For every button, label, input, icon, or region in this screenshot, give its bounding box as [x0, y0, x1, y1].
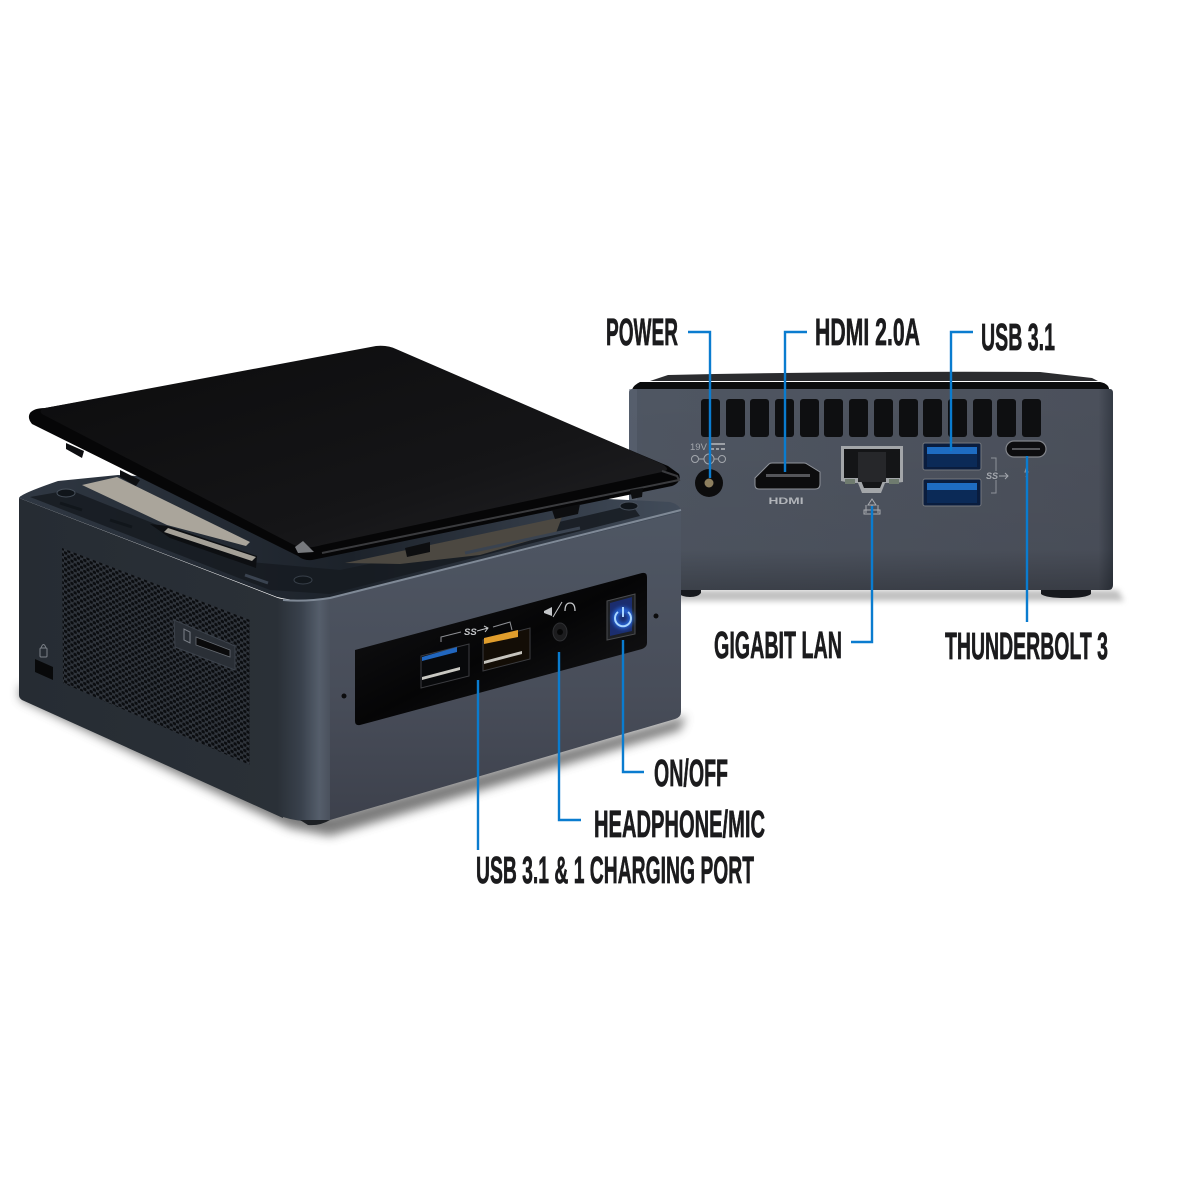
rounded corner strip: [277, 596, 330, 821]
leader: gigabit LAN: [851, 506, 872, 642]
rear device feet: [678, 589, 1091, 598]
leader: power: [688, 332, 710, 478]
leader: USB 3.1 rear: [951, 332, 973, 451]
left side face: [19, 498, 283, 818]
SS USB logo: SS: [464, 627, 477, 638]
lid clips: [66, 443, 643, 557]
headphone and mic jack: [544, 602, 575, 641]
right device: rear view: [629, 372, 1124, 601]
leader: USB 3.1 front: [477, 680, 479, 850]
shadow under rear device: [660, 590, 1124, 601]
rear bar details: [60, 503, 132, 527]
leader: Thunderbolt 3: [1026, 456, 1028, 622]
leader lines: [478, 332, 1027, 850]
HDMI port: [755, 463, 820, 506]
power jack with 19V marking: [690, 442, 726, 497]
silver drive bay: [82, 477, 250, 546]
label: HEADPHONE/MIC: HEADPHONE/MIC: [594, 804, 765, 846]
leader: headphone/mic: [559, 652, 581, 820]
power jack with 19V marking: 19V: [690, 442, 708, 453]
rear vent slots: [701, 399, 1041, 437]
rear device lid: [632, 382, 1109, 391]
front black port panel: [342, 573, 658, 725]
label: USB 3.1: USB 3.1: [981, 317, 1055, 359]
HDMI port: HDMI: [768, 496, 804, 506]
raised black lid: [29, 347, 680, 560]
rear device body: [629, 389, 1113, 590]
right front face: [330, 507, 681, 820]
front USB orange charging port: [483, 628, 530, 671]
front USB blue port: [421, 644, 469, 688]
left device: front view with raised lid: [19, 346, 686, 836]
top face: [19, 475, 681, 600]
front device foot: [300, 820, 330, 825]
LAN port: [841, 446, 903, 514]
label: POWER: POWER: [606, 312, 678, 354]
label: GIGABIT LAN: GIGABIT LAN: [714, 625, 842, 667]
shadow under front device: [20, 685, 686, 836]
leader: HDMI: [785, 332, 807, 472]
label: ON/OFF: ON/OFF: [654, 753, 728, 795]
power button: [607, 594, 635, 640]
USB 3.1 rear ports: SS: [986, 471, 998, 481]
USB-C Thunderbolt port: [1006, 441, 1046, 477]
side mesh vent: [62, 548, 250, 765]
SD card slot: [174, 620, 235, 670]
lock slot: [35, 644, 53, 680]
label: USB 3.1 & 1 CHARGING PORT: USB 3.1 & 1 CHARGING PORT: [476, 850, 754, 892]
USB 3.1 rear ports: [923, 443, 1008, 506]
label: HDMI 2.0A: HDMI 2.0A: [815, 312, 920, 354]
screw holes: [57, 489, 638, 584]
leader: on/off: [623, 640, 644, 772]
dark disc under lid: [345, 517, 562, 564]
SS USB logo: [441, 622, 512, 642]
